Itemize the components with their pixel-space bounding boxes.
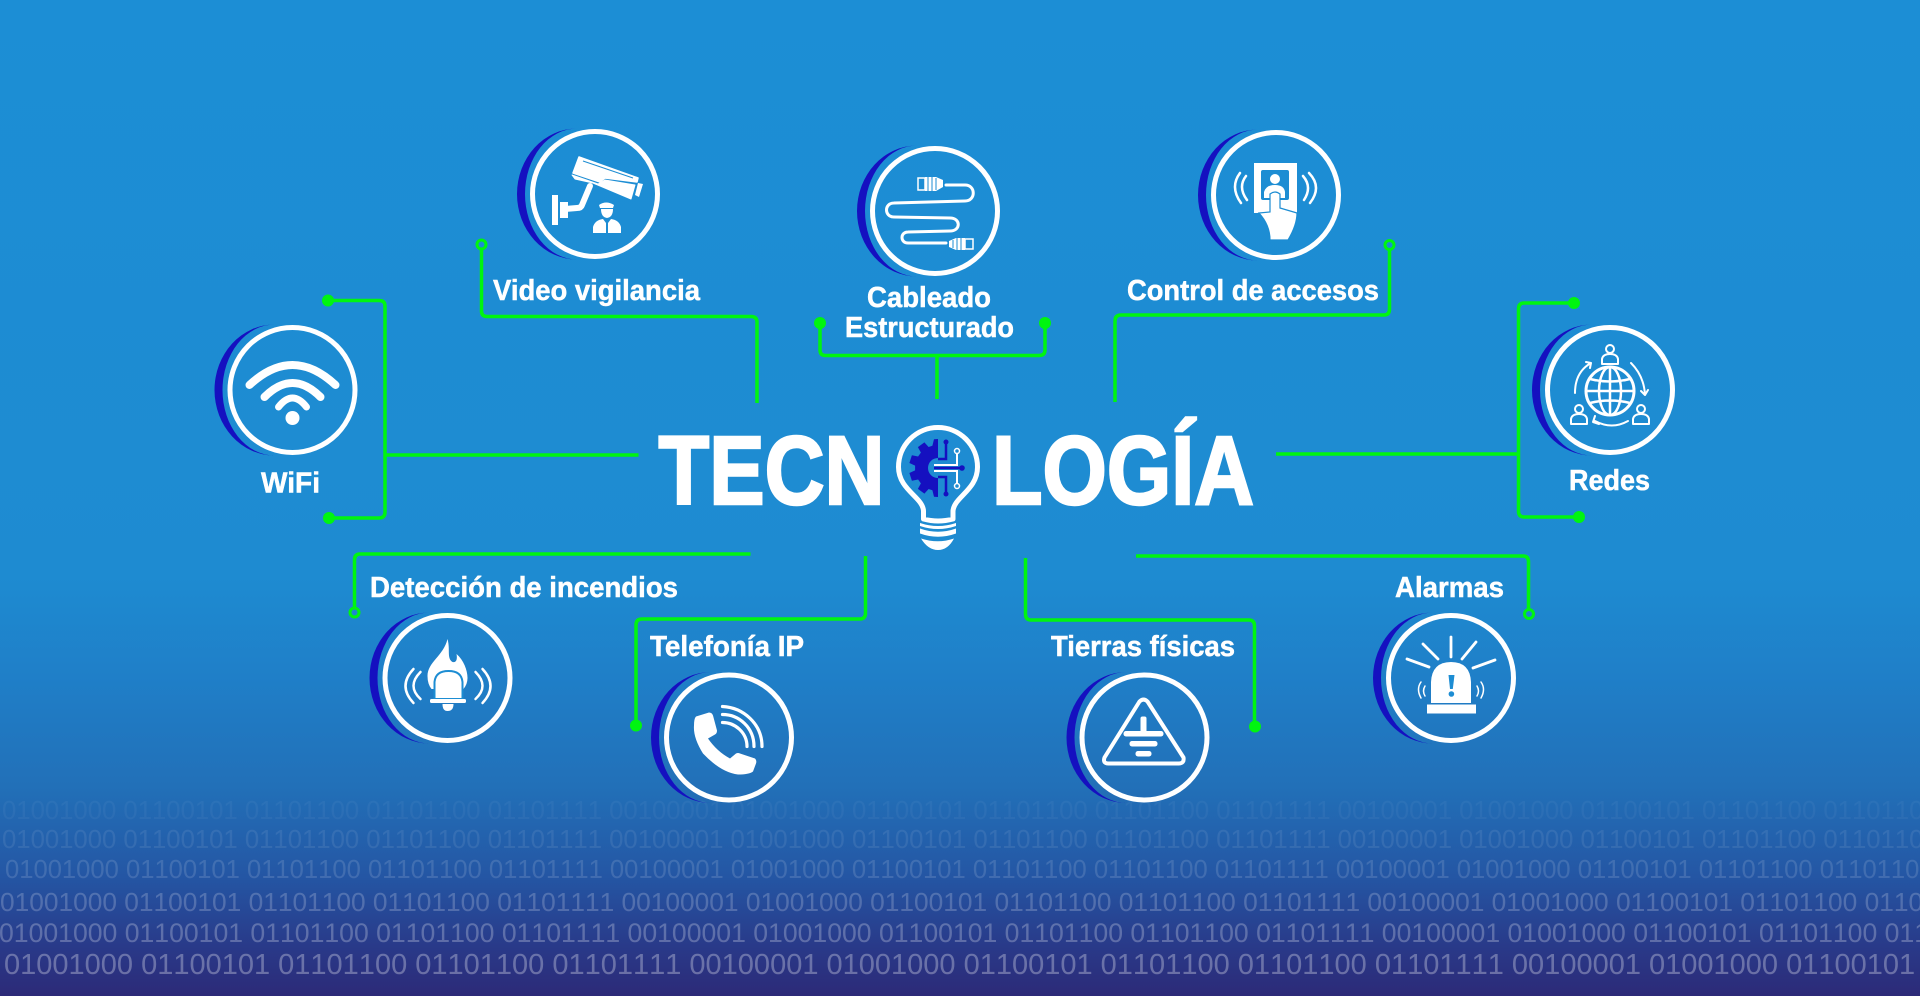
icon: siren	[1373, 612, 1514, 744]
icon: global network	[1532, 324, 1672, 456]
binary code pattern	[0, 797, 1920, 981]
icon: ground symbol	[1066, 672, 1207, 803]
icon: security camera and guard	[517, 128, 658, 260]
connector	[1276, 303, 1579, 517]
icon: access control	[1198, 130, 1338, 260]
panel: Alarmas	[1136, 556, 1534, 744]
panel: Tierras físicas	[1026, 558, 1261, 803]
panel: WiFi	[214, 294, 638, 524]
title text left: TECN	[658, 416, 884, 525]
panel: Video vigilancia	[477, 128, 757, 403]
circuit traces	[934, 442, 962, 494]
panel: Control de accesos	[1115, 130, 1394, 402]
connector	[328, 300, 638, 518]
label: Redes	[1569, 465, 1650, 497]
panel: Redes	[1276, 297, 1672, 523]
panel: Detección de incendios	[350, 554, 750, 744]
connector	[1026, 558, 1254, 726]
label: Tierras físicas	[1051, 631, 1235, 663]
icon: wifi	[214, 324, 355, 456]
label: Control de accesos	[1127, 275, 1379, 307]
title: TECNOLOGÍA with light bulb	[658, 416, 1254, 550]
label line 2: Estructurado	[845, 312, 1014, 344]
panel: Telefonía IP	[630, 556, 866, 803]
label: Cableado	[867, 282, 991, 314]
connector	[1115, 250, 1390, 402]
label: Detección de incendios	[370, 572, 678, 604]
connector	[482, 249, 757, 403]
connector	[1136, 556, 1528, 609]
label: Video vigilancia	[493, 275, 701, 307]
icon: network cable	[857, 146, 998, 276]
connector	[820, 323, 1045, 399]
connector	[354, 554, 750, 608]
title text right: LOGÍA	[992, 416, 1254, 525]
connector	[636, 556, 866, 725]
icon: light bulb	[898, 428, 978, 550]
label: WiFi	[261, 468, 320, 500]
label: Telefonía IP	[650, 631, 804, 663]
icon: telephone	[651, 672, 792, 803]
panel: Cableado Estructurado	[814, 146, 1051, 399]
icon: half gear	[909, 439, 938, 497]
label: Alarmas	[1395, 572, 1504, 604]
icon: fire alarm bell	[370, 612, 510, 744]
